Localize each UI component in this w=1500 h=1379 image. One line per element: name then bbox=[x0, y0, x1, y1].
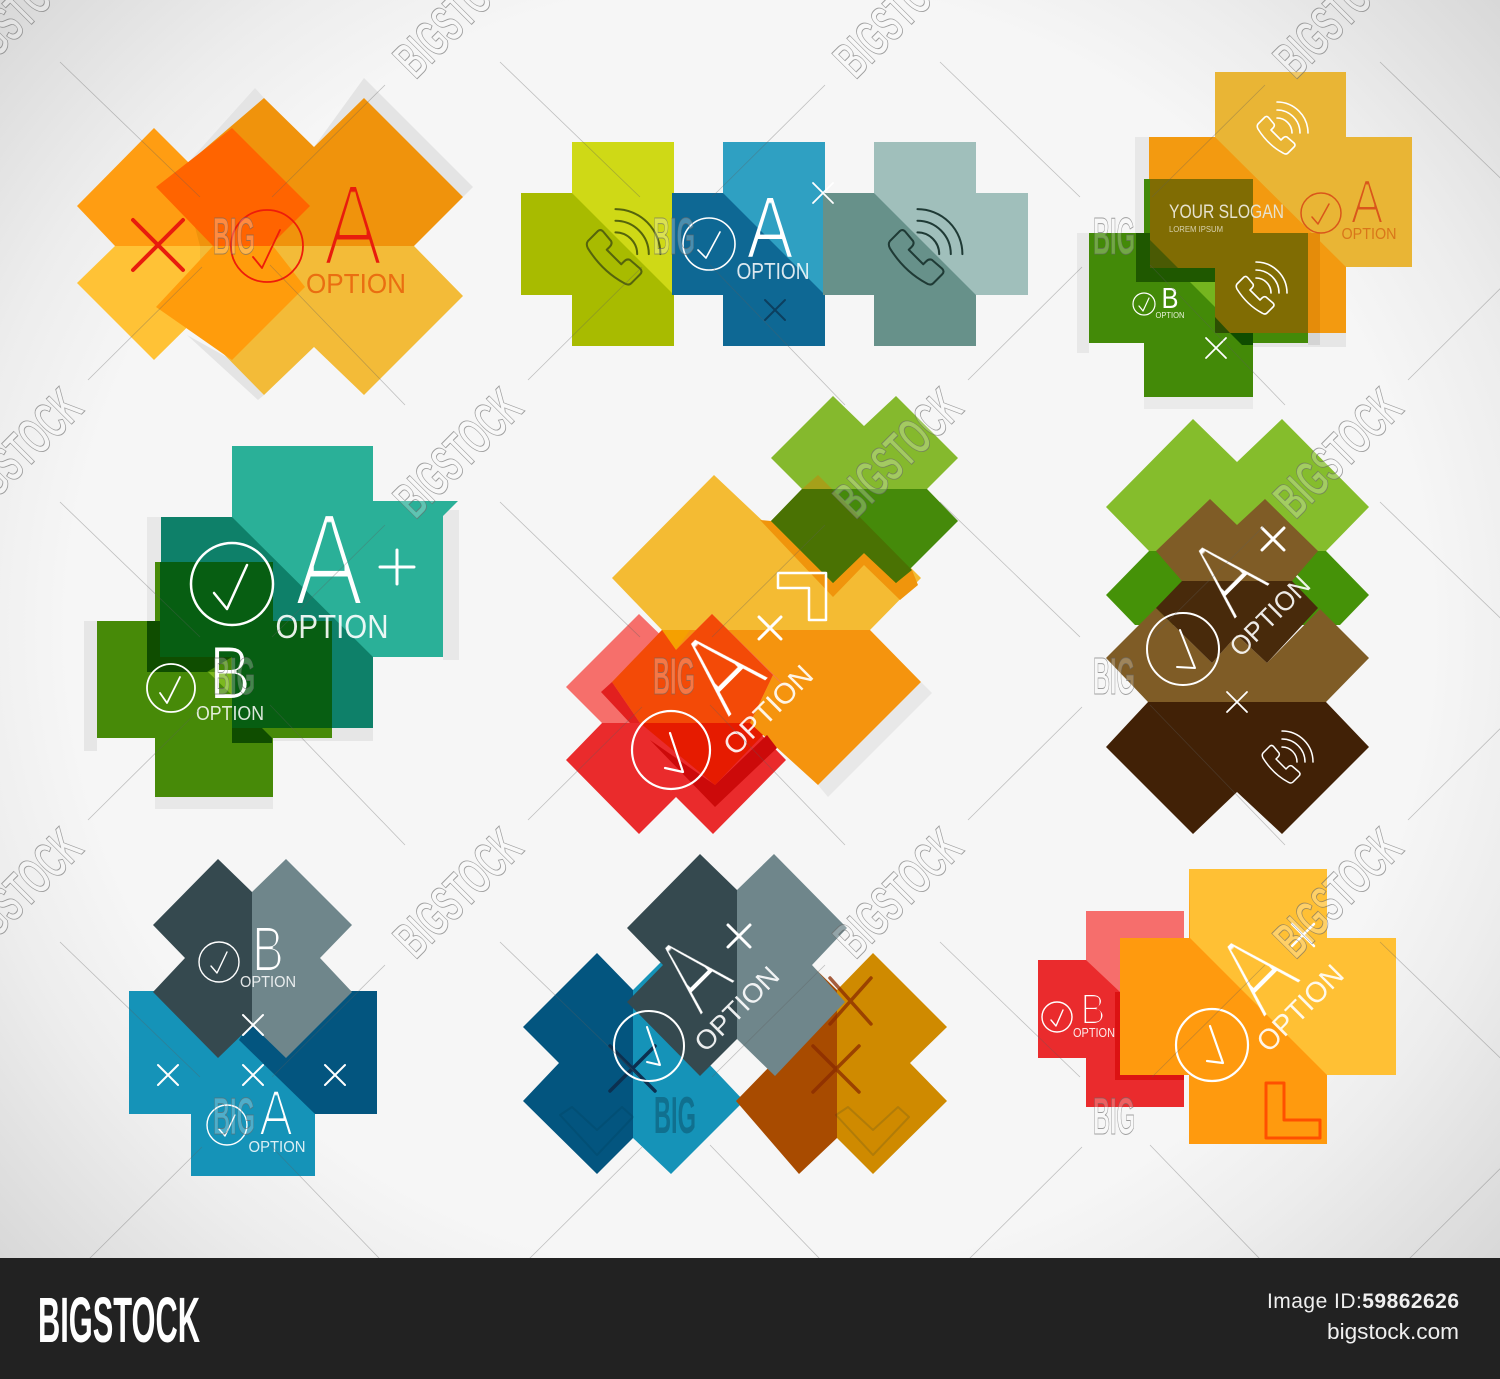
footer bar bbox=[0, 1258, 1500, 1379]
icon: check circle bbox=[683, 218, 735, 270]
footer bar: BIGSTOCK bbox=[38, 1284, 200, 1356]
watermark: BIG text: BIG bbox=[653, 648, 695, 706]
watermark: diagonal BIGSTOCK text: BIGSTOCK bbox=[1263, 818, 1414, 969]
icon: white cross upper bbox=[1262, 528, 1284, 550]
option label small: OPTION bbox=[1156, 310, 1184, 320]
icon: phone upper bbox=[1257, 102, 1308, 154]
icon: check circle rotated bbox=[632, 711, 710, 789]
letter A rotated: A bbox=[1190, 906, 1322, 1038]
letter A rotated: A bbox=[651, 600, 790, 739]
icon: check circle rotated bbox=[1147, 613, 1219, 685]
letter A: A bbox=[746, 178, 794, 277]
watermark: BIG text: BIG bbox=[213, 208, 255, 266]
icon: chevrons bbox=[560, 1107, 909, 1155]
letter A rotated: A bbox=[630, 909, 755, 1035]
letter B: B bbox=[209, 631, 251, 716]
text: BIG bbox=[1093, 208, 1135, 266]
panel: blue slate orange crosses, bottom center bbox=[523, 854, 947, 1174]
text: BIG bbox=[1093, 1088, 1135, 1146]
watermark: diagonal BIGSTOCK text: BIGSTOCK bbox=[823, 378, 974, 529]
panel: teal and green plus, middle left bbox=[84, 446, 459, 809]
letter A: A bbox=[259, 1077, 293, 1149]
icon: check circle rotated bbox=[614, 1011, 684, 1081]
icon: check circle lower bbox=[207, 1105, 247, 1145]
option label rotated: OPTION bbox=[689, 961, 785, 1057]
panel: yellow and green plus, top right bbox=[1077, 72, 1412, 409]
watermark: diagonal BIGSTOCK text: BIGSTOCK bbox=[1263, 378, 1414, 529]
option label small: OPTION bbox=[196, 703, 264, 725]
slogan text: YOUR SLOGAN bbox=[1169, 202, 1284, 223]
letter B: B bbox=[1162, 283, 1178, 315]
image id: Image ID:59862626 bbox=[1267, 1290, 1459, 1313]
watermark: diagonal BIGSTOCK text bbox=[0, 0, 1414, 969]
icon: corner arrow bbox=[778, 573, 826, 620]
icon: check circle orange bbox=[1301, 193, 1341, 233]
letter B: B bbox=[252, 913, 284, 985]
letter A: A bbox=[1350, 168, 1384, 237]
icon: phone lower bbox=[1236, 262, 1287, 314]
option label: OPTION bbox=[276, 608, 388, 645]
icon: four crosses bbox=[158, 1015, 345, 1085]
panel: red and yellow plus, bottom right bbox=[1038, 869, 1396, 1144]
slate cross bbox=[627, 854, 737, 1076]
option label: OPTION bbox=[240, 974, 296, 991]
letter A: A bbox=[323, 160, 383, 290]
icon: navy cross bbox=[610, 1046, 655, 1091]
watermark: diagonal BIGSTOCK text: BIGSTOCK bbox=[383, 818, 534, 969]
site url: bigstock.com bbox=[1327, 1319, 1459, 1344]
icon: white cross bbox=[759, 617, 781, 639]
watermark: diagonal BIGSTOCK text: BIGSTOCK bbox=[383, 378, 534, 529]
option label lower: OPTION bbox=[248, 1139, 306, 1156]
watermark: BIG text bbox=[213, 208, 1135, 1146]
letter A: A bbox=[294, 486, 364, 633]
icon: check circle small bbox=[1133, 293, 1155, 315]
panel: center diamonds yellow red green bbox=[566, 396, 958, 834]
panel: green and brown crosses, middle right bbox=[1106, 419, 1369, 834]
text: BIG bbox=[1093, 648, 1135, 706]
icon: dark crosses bbox=[813, 978, 871, 1092]
icon: check circle small bbox=[147, 664, 195, 712]
option label rotated: OPTION bbox=[717, 659, 820, 762]
watermark: BIG text: BIG bbox=[213, 1088, 255, 1146]
icon: red cross bbox=[133, 220, 183, 270]
watermark: diagonal BIGSTOCK text: BIGSTOCK bbox=[823, 818, 974, 969]
option label rotated: OPTION bbox=[1251, 959, 1351, 1059]
panel: three plus shapes, top center bbox=[521, 142, 1028, 346]
watermark: BIG text: BIG bbox=[653, 208, 695, 266]
icon: phone right bbox=[889, 209, 962, 285]
panel: slate cross on blue plus, bottom left bbox=[129, 859, 377, 1176]
icon: phone left bbox=[587, 209, 660, 285]
option label: OPTION bbox=[306, 268, 406, 299]
icon: plus bbox=[380, 550, 414, 584]
icon: check circle bbox=[199, 942, 239, 982]
icon: white cross bbox=[728, 925, 750, 947]
lorem text: LOREM IPSUM bbox=[1169, 225, 1223, 234]
option label: OPTION bbox=[736, 258, 810, 284]
option label small: OPTION bbox=[1073, 1025, 1115, 1040]
icon: white cross lower bbox=[1227, 692, 1247, 712]
letter B: B bbox=[1080, 985, 1106, 1034]
icon: check circle rotated bbox=[1176, 1009, 1248, 1081]
panel: orange diamond cross, top left bbox=[77, 78, 473, 400]
letter A rotated: A bbox=[1162, 511, 1291, 639]
watermark: BIG text: BIG bbox=[213, 648, 255, 706]
icon: check circle bbox=[231, 210, 303, 282]
panel: blue slate orange crosses, bottom center: BIG bbox=[654, 1087, 696, 1145]
option label: OPTION bbox=[1342, 226, 1396, 243]
icon: white cross bbox=[1292, 924, 1314, 946]
icon: white cross bbox=[1206, 338, 1226, 358]
icon: check circle large bbox=[191, 543, 273, 625]
icon: dark cross bbox=[765, 300, 785, 320]
option label rotated: OPTION bbox=[1224, 570, 1316, 662]
icon: white cross bbox=[813, 183, 833, 203]
icon: check circle small bbox=[1042, 1002, 1072, 1032]
icon: L arrow bbox=[1266, 1083, 1320, 1138]
icon: phone bbox=[1262, 731, 1313, 783]
